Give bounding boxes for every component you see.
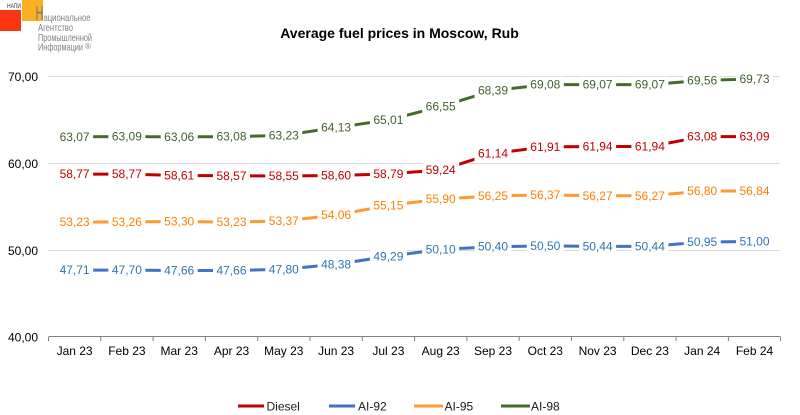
y axis labels: 50,00 bbox=[8, 244, 38, 258]
data labels: diesel: 63,08 bbox=[687, 130, 718, 144]
y axis labels: 60,00 bbox=[8, 157, 38, 171]
logo bbox=[0, 0, 92, 54]
data labels: AI-95: 55,15 bbox=[373, 198, 404, 212]
x axis labels: Feb 24 bbox=[736, 344, 774, 358]
data labels: AI-98: 63,06 bbox=[164, 130, 195, 144]
data labels: diesel: 58,79 bbox=[373, 167, 404, 181]
data labels: AI-95: 53,30 bbox=[164, 215, 195, 229]
logo: ® bbox=[85, 42, 91, 51]
data labels: AI-92: 48,38 bbox=[321, 257, 351, 271]
data labels: diesel: 58,77 bbox=[112, 167, 142, 181]
y axis labels: 40,00 bbox=[8, 330, 38, 344]
data labels: AI-98: 69,56 bbox=[687, 73, 718, 87]
x axis labels: Sep 23 bbox=[474, 344, 512, 358]
x axis labels: Mar 23 bbox=[161, 344, 198, 358]
data labels: AI-95: 56,27 bbox=[583, 189, 613, 203]
x axis labels: Jan 24 bbox=[684, 344, 721, 358]
data labels: AI-98 bbox=[56, 71, 773, 145]
data labels: AI-92: 47,71 bbox=[60, 263, 90, 277]
data labels: AI-95: 56,84 bbox=[739, 184, 770, 198]
data labels: diesel: 59,24 bbox=[426, 163, 456, 177]
data labels: diesel: 61,14 bbox=[478, 146, 508, 160]
data labels: AI-95: 53,26 bbox=[112, 215, 142, 229]
logo: Н bbox=[36, 3, 44, 25]
line: AI-95 bbox=[75, 191, 755, 222]
legend item: AI-98: AI-98 bbox=[531, 400, 560, 414]
x axis labels bbox=[57, 344, 774, 358]
x axis labels: Nov 23 bbox=[579, 344, 617, 358]
x axis labels: Jun 23 bbox=[318, 344, 354, 358]
legend item: AI-95: AI-95 bbox=[444, 400, 474, 414]
y axis labels bbox=[8, 70, 38, 344]
logo: ациональное bbox=[44, 12, 91, 24]
data labels: AI-98: 64,13 bbox=[321, 121, 351, 135]
data labels: AI-92: 47,66 bbox=[164, 264, 195, 278]
data labels: diesel: 58,60 bbox=[321, 169, 351, 183]
x axis labels: Aug 23 bbox=[422, 344, 460, 358]
data labels: AI-92: 50,44 bbox=[635, 239, 665, 253]
data labels: AI-98: 63,23 bbox=[269, 128, 299, 142]
data labels: AI-98: 63,09 bbox=[112, 130, 142, 144]
data labels: AI-95: 56,37 bbox=[530, 188, 561, 202]
x axis labels: Feb 23 bbox=[108, 344, 146, 358]
title: Average fuel prices in Moscow, Rub bbox=[280, 25, 519, 41]
data labels: diesel: 58,57 bbox=[216, 169, 247, 183]
data labels: AI-92: 47,66 bbox=[216, 264, 247, 278]
data labels: AI-92: 50,95 bbox=[687, 235, 718, 249]
line: diesel bbox=[75, 137, 755, 176]
data labels: AI-95: 53,23 bbox=[216, 215, 247, 229]
legend item: Diesel: Diesel bbox=[266, 400, 300, 414]
data labels: AI-95: 53,23 bbox=[60, 215, 90, 229]
data labels: AI-98: 69,07 bbox=[635, 78, 665, 92]
data labels: AI-98: 69,08 bbox=[530, 78, 561, 92]
legend item: Diesel bbox=[238, 400, 300, 414]
x axis labels: Jan 23 bbox=[57, 344, 93, 358]
x axis labels: Dec 23 bbox=[631, 344, 669, 358]
logo: Информации bbox=[38, 42, 83, 54]
data labels: AI-92: 50,50 bbox=[530, 239, 561, 253]
data labels: diesel: 58,61 bbox=[164, 168, 195, 182]
data labels: AI-98: 65,01 bbox=[373, 113, 404, 127]
data labels: AI-98: 66,55 bbox=[426, 100, 456, 114]
data labels: AI-92: 47,70 bbox=[112, 263, 142, 277]
x axis labels: Jul 23 bbox=[372, 344, 405, 358]
data labels: AI-98: 68,39 bbox=[478, 84, 508, 98]
legend item: AI-92 bbox=[329, 400, 387, 414]
data labels: AI-92: 50,40 bbox=[478, 240, 508, 254]
line: AI-92 bbox=[75, 242, 755, 271]
data labels: AI-98: 63,08 bbox=[216, 130, 247, 144]
data labels: AI-92: 50,10 bbox=[426, 242, 456, 256]
logo: НАПИ bbox=[7, 4, 21, 10]
data labels: diesel bbox=[56, 129, 773, 184]
legend item: AI-98 bbox=[501, 400, 560, 414]
legend item: AI-92: AI-92 bbox=[358, 400, 387, 414]
data labels: AI-98: 69,73 bbox=[739, 72, 770, 86]
data labels: diesel: 61,91 bbox=[530, 140, 561, 154]
x axis bbox=[48, 336, 780, 341]
logo: Агентство bbox=[38, 22, 73, 34]
data labels: AI-95: 56,27 bbox=[635, 189, 665, 203]
data labels: AI-95: 54,06 bbox=[321, 208, 351, 222]
logo: Промышленной bbox=[38, 32, 92, 44]
data labels: AI-95: 56,80 bbox=[687, 184, 718, 198]
data labels: AI-98: 63,07 bbox=[60, 130, 90, 144]
data labels: AI-98: 69,07 bbox=[583, 78, 613, 92]
x axis labels: Oct 23 bbox=[528, 344, 563, 358]
x axis labels: May 23 bbox=[264, 344, 304, 358]
data labels: AI-95: 56,25 bbox=[478, 189, 508, 203]
data labels: diesel: 63,09 bbox=[739, 130, 770, 144]
data labels: AI-92: 49,29 bbox=[373, 249, 404, 263]
x axis labels: Apr 23 bbox=[214, 344, 250, 358]
data labels: AI-92 bbox=[56, 234, 773, 279]
data labels: diesel: 61,94 bbox=[583, 140, 613, 154]
data labels: AI-95 bbox=[56, 183, 773, 230]
data labels: AI-92: 51,00 bbox=[739, 235, 770, 249]
data labels: diesel: 58,55 bbox=[269, 169, 299, 183]
legend bbox=[238, 400, 560, 414]
legend item: AI-95 bbox=[414, 400, 474, 414]
data labels: diesel: 58,77 bbox=[60, 167, 90, 181]
data labels: diesel: 61,94 bbox=[635, 140, 665, 154]
data labels: AI-95: 55,90 bbox=[426, 192, 456, 206]
data labels: AI-92: 50,44 bbox=[583, 239, 613, 253]
data labels: AI-95: 53,37 bbox=[269, 214, 299, 228]
line: AI-98 bbox=[75, 79, 755, 137]
y axis labels: 70,00 bbox=[8, 70, 38, 84]
data labels: AI-92: 47,80 bbox=[269, 262, 299, 276]
